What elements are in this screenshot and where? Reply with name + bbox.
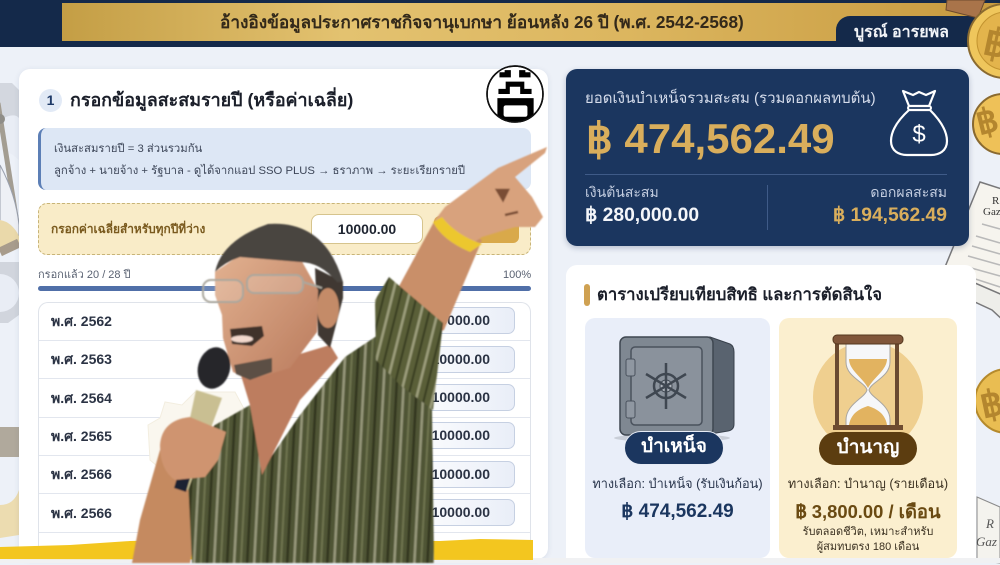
comparison heading: ตารางเปรียบเทียบสิทธิ และการตัดสินใจ (597, 285, 882, 304)
row 2565: พ.ศ. 2565 (51, 428, 112, 444)
option: lump sum (585, 318, 770, 558)
value 2564 (400, 384, 515, 411)
icon: money bag: $ (912, 121, 926, 148)
progress bar (38, 286, 531, 291)
yellow brush stripe (0, 539, 533, 560)
principal label: เงินต้นสะสม (585, 184, 659, 200)
lump sum label: ทางเลือก: บำเหน็จ (รับเงินก้อน) (592, 477, 763, 491)
icon: safe (614, 336, 734, 440)
default value input (311, 214, 423, 244)
panel: comparison (566, 265, 976, 558)
heading accent (584, 284, 590, 306)
row 2563: พ.ศ. 2563 (51, 351, 112, 367)
option: monthly pension (779, 318, 957, 558)
gold subtitle bar (62, 3, 1000, 41)
coin top (968, 4, 1000, 78)
step number: 1 (47, 92, 54, 108)
gazette paper top (930, 182, 1000, 322)
principal amount: ฿ 280,000.00 (585, 205, 699, 226)
left forearm (132, 450, 200, 563)
value 2566 (400, 461, 515, 488)
cap (215, 224, 343, 282)
value 2565 (400, 422, 515, 449)
step number (39, 89, 62, 112)
hair and ear (315, 268, 343, 348)
gazette paper bottom: R (985, 516, 994, 531)
card heading: กรอกข้อมูลสะสมรายปี (หรือค่าเฉลี่ย) (70, 90, 353, 110)
lump sum pill: บำเหน็จ (641, 436, 707, 457)
gazette paper bottom (976, 497, 1000, 563)
pension amount: ฿ 3,800.00 / เดือน (795, 501, 941, 522)
shirt body (186, 335, 434, 563)
left side decoration: gears and hourglass (0, 83, 19, 538)
logo badge (486, 65, 544, 123)
row 2566 second: พ.ศ. 2566 (51, 505, 112, 521)
panel: input card (19, 69, 548, 559)
row 2566: พ.ศ. 2566 (51, 466, 112, 482)
gazette paper top: R (992, 195, 1000, 207)
face (215, 255, 318, 380)
vertical divider (767, 185, 768, 230)
row 2564: พ.ศ. 2564 (51, 390, 112, 406)
hand holding mic (160, 417, 226, 480)
value 2563 (400, 346, 515, 373)
coin lower (975, 369, 1000, 433)
year rows (39, 307, 530, 533)
pension label: ทางเลือก: บำนาญ (รายเดือน) (788, 477, 948, 491)
info line 2: ลูกจ้าง + นายจ้าง + รัฐบาล - ดูได้จากแอป SSO PLUS → ธราภาพ → ระยะเรียกรายปี (54, 165, 465, 177)
value 2566 second (400, 499, 515, 526)
total amount: ฿ 474,562.49 (586, 115, 835, 162)
total label: ยอดเงินบำเหน็จรวมสะสม (รวมดอกผลทบต้น) (585, 90, 876, 107)
value 2564: 10000.00 (432, 389, 490, 405)
default value box (38, 203, 531, 255)
value 2562: 10000.00 (432, 312, 490, 328)
pension note (803, 526, 933, 553)
hand pointing (435, 147, 547, 245)
pension note: ผู้สมทบตรง 180 เดือน (817, 541, 919, 553)
value 2566 second: 10000.00 (432, 504, 490, 520)
horizontal divider (585, 174, 947, 175)
beard and mouth (230, 326, 272, 380)
gazette paper bottom: Gaz (976, 534, 997, 549)
subtitle text: อ้างอิงข้อมูลประกาศราชกิจจานุเบกษา ย้อนหลัง 26 ปี (พ.ศ. 2542-2568) (220, 12, 744, 32)
info box (38, 128, 531, 190)
row 2562: พ.ศ. 2562 (51, 313, 112, 329)
value 2563: 10000.00 (432, 351, 490, 367)
value 2565: 10000.00 (432, 427, 490, 443)
pension pill: บำนาญ (837, 437, 899, 458)
value 2562 (400, 307, 515, 334)
raised arm (378, 218, 482, 345)
neck and chest skin (240, 345, 338, 475)
bottom strip (0, 558, 1000, 563)
icon: money bag (890, 90, 948, 156)
value 2566: 10000.00 (432, 466, 490, 482)
apply button (434, 216, 519, 243)
wristband (433, 217, 482, 252)
interest amount: ฿ 194,562.49 (833, 205, 947, 226)
panel: total savings (566, 69, 969, 246)
microphone (174, 344, 235, 492)
author tab (836, 16, 976, 47)
default value input: 10000.00 (338, 221, 396, 237)
progress label: กรอกแล้ว 20 / 28 ปี (38, 269, 131, 281)
lump sum pill (624, 431, 724, 465)
progress percent: 100% (503, 269, 531, 281)
lump sum amount: ฿ 474,562.49 (621, 501, 734, 522)
header band (0, 0, 1000, 47)
pension pill (819, 432, 917, 465)
book corner (946, 0, 985, 18)
icon: hourglass (813, 334, 923, 434)
info line 1: เงินสะสมรายปี = 3 ส่วนรวมกัน (54, 143, 202, 155)
pension note: รับตลอดชีวิต, เหมาะสำหรับ (803, 526, 933, 538)
glasses (203, 275, 322, 302)
author name: บูรณ์ อารยพล (854, 24, 949, 41)
year table (38, 302, 531, 559)
interest label: ดอกผลสะสม (870, 184, 947, 200)
sleeve (375, 277, 443, 410)
default value label: กรอกค่าเฉลี่ยสำหรับทุกปีที่ว่าง (51, 222, 205, 236)
